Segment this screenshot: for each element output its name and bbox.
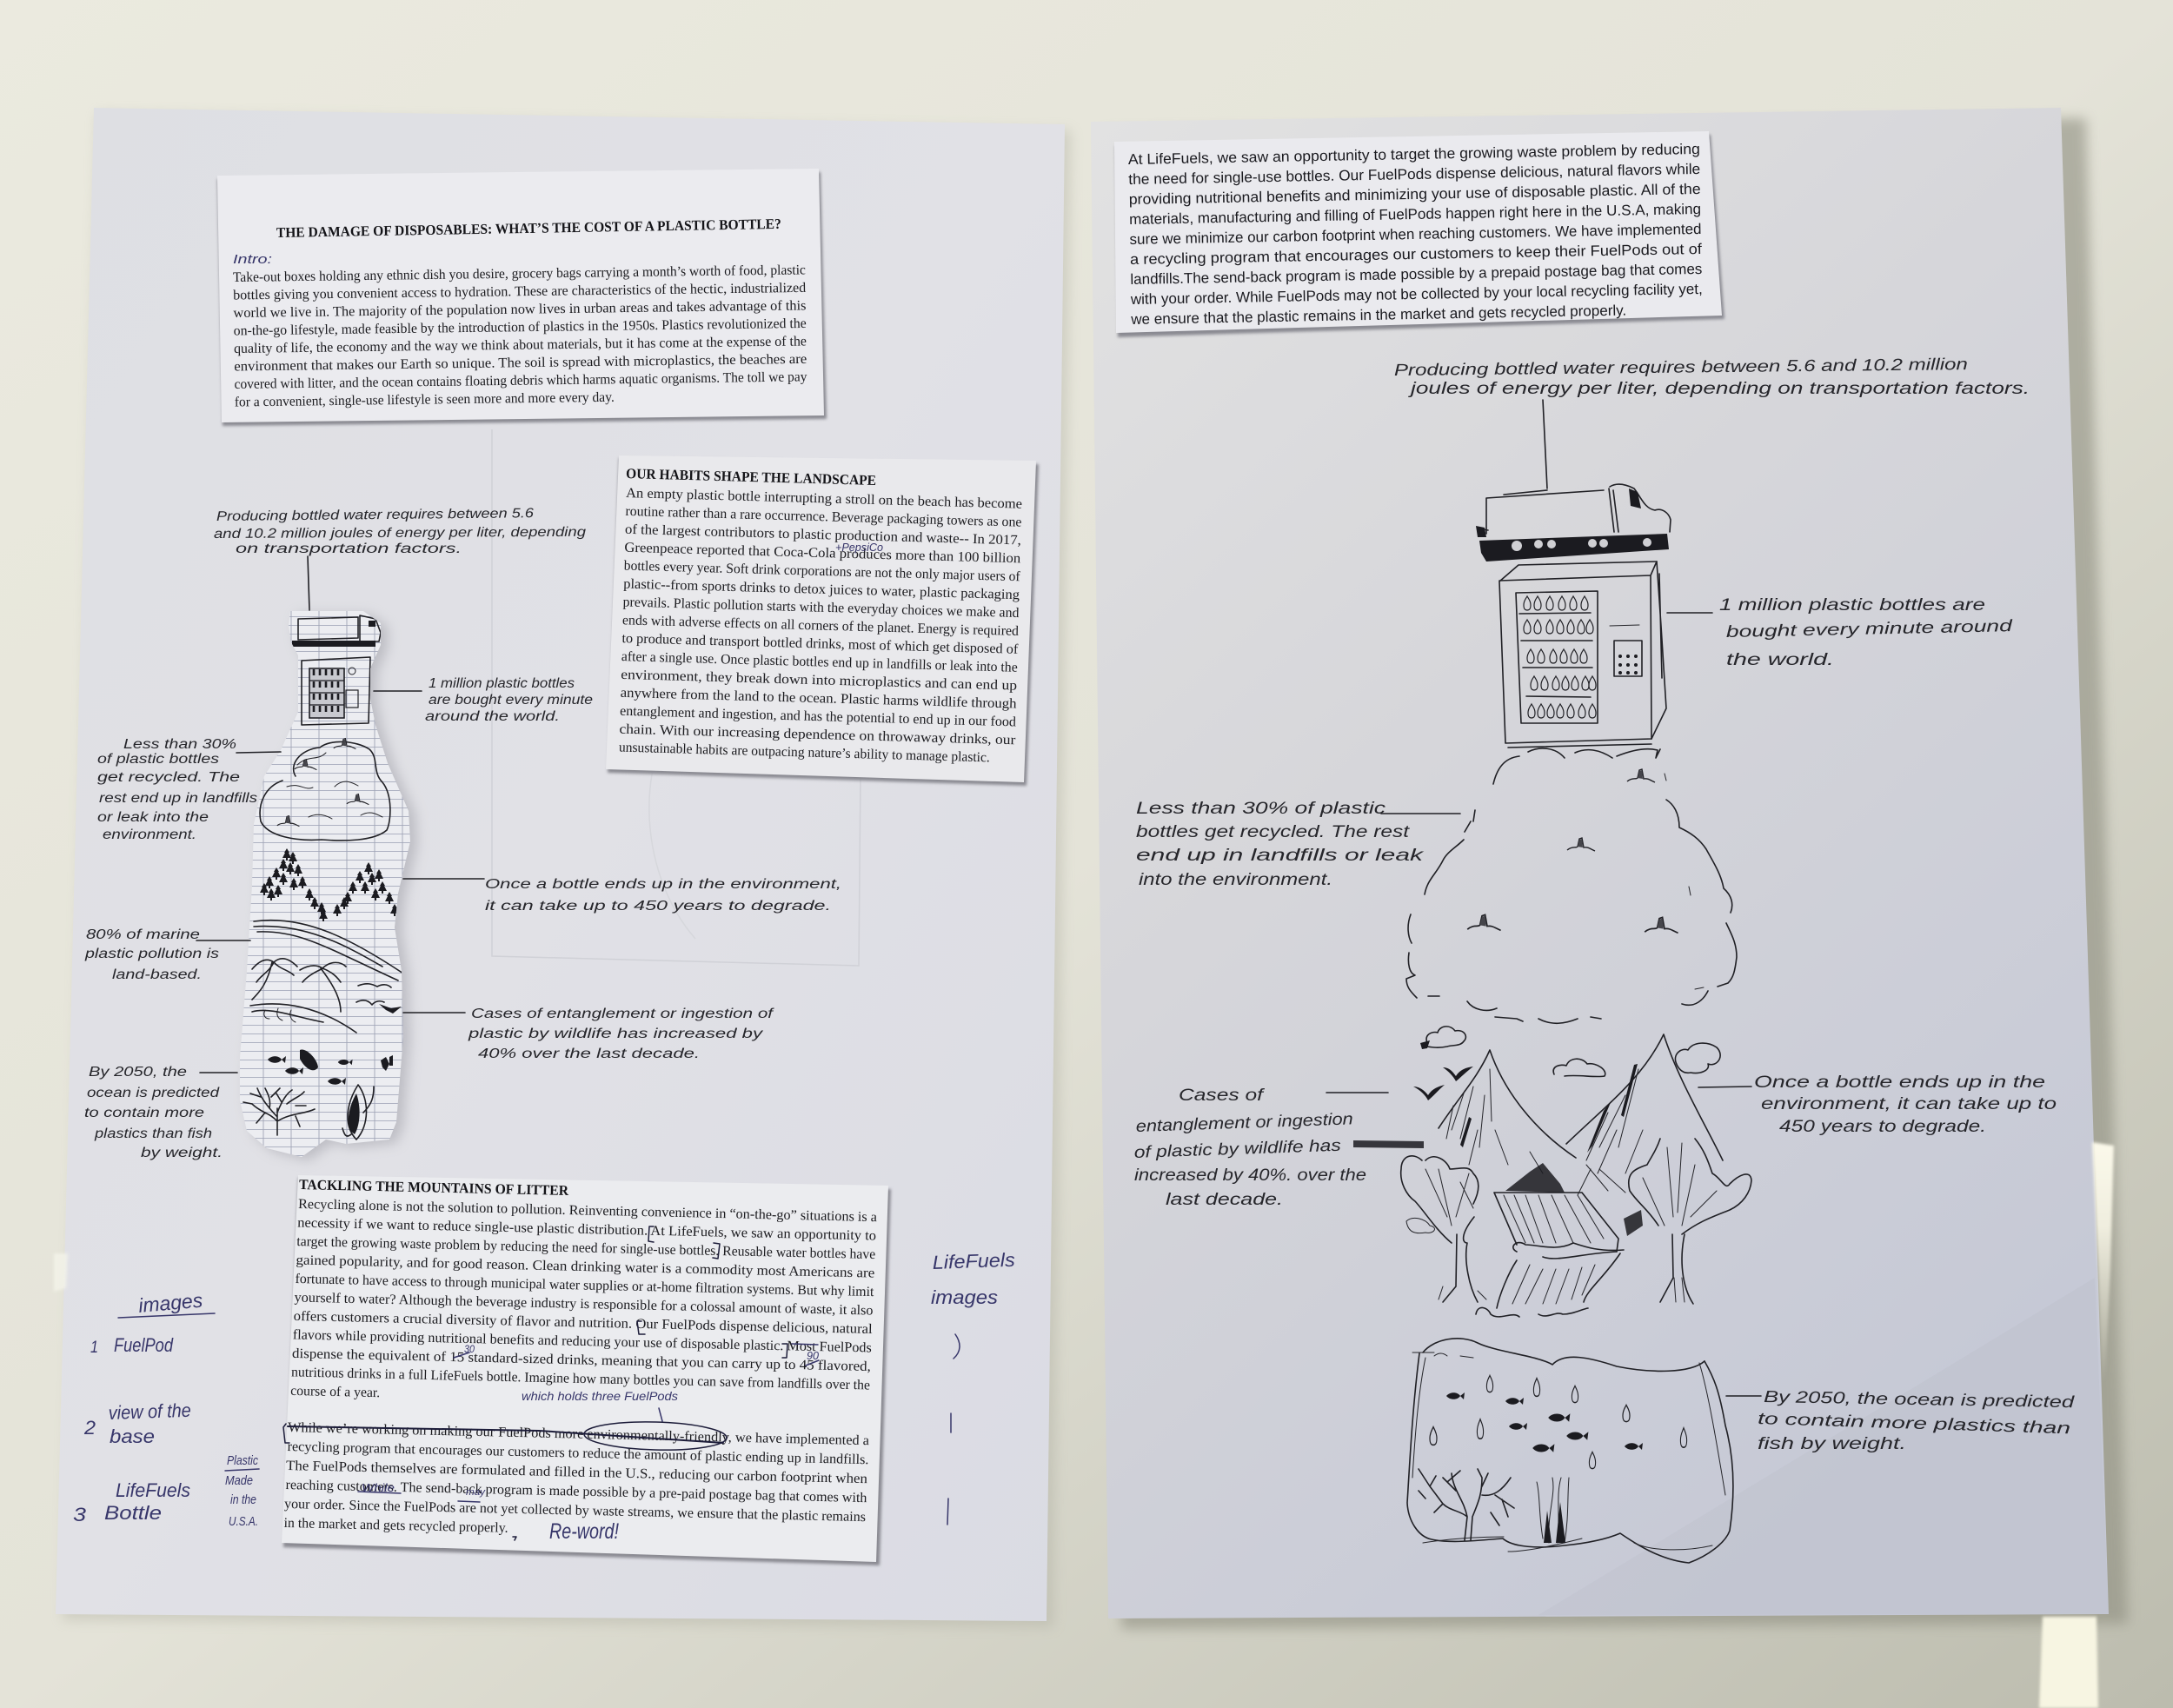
clouds and birds <box>1413 1027 1720 1100</box>
notes: lifefuels images: LifeFuels <box>932 1249 1015 1273</box>
text block: lifefuels strip: a recycling program that encourages our customers to keep their FuelPods out of <box>1130 241 1702 268</box>
right tree <box>1629 1139 1751 1304</box>
icon: small truck <box>292 615 381 647</box>
coral <box>1419 1469 1514 1540</box>
callout: one million bottles <box>1667 596 2014 669</box>
editing marks <box>283 1226 819 1540</box>
callout: entanglement: 40% over the last decade. <box>478 1047 700 1061</box>
text block: tackling second paragraph: While we’re working on making our FuelPods more environmentally-friendly, we have implemented a <box>288 1420 869 1448</box>
text block: intro paragraph: environment that makes our Earth so unique. The soil is spread with microplastics, the beaches are <box>234 352 807 374</box>
text block: lifefuels strip <box>1114 131 1724 337</box>
text block: habits paragraph: chain. With our increasing dependence on throwaway drinks, our <box>619 722 1016 748</box>
callout: entanglement: increased by 40%. over the <box>1134 1166 1366 1185</box>
callout: recycling rate: bottles get recycled. The rest <box>1136 823 1410 841</box>
callout: ocean 2050: By 2050, the <box>89 1065 187 1080</box>
text block: tackling first paragraph: Recycling alone is not the solution to pollution. Reinventing convenience in “on-the-go” situations is a <box>298 1197 877 1225</box>
callout: energy: joules of energy per liter, depending on transportation factors. <box>1407 380 2030 398</box>
callout: recycling rate <box>1136 800 1460 889</box>
illustration: ocean tank <box>1407 1339 1733 1563</box>
notes: images list: U.S.A. <box>229 1514 258 1529</box>
callout: degrade time: environment, it can take up to <box>1761 1095 2057 1113</box>
illustration: mountains, trees and waterfall <box>1401 1027 1751 1317</box>
text block: lifefuels strip: the need for single-use bottles. Our FuelPods dispense delicious, natural flavors while <box>1128 161 1700 188</box>
callout: one million bottles: around the world. <box>425 709 560 724</box>
callout: one million bottles: bought every minute around <box>1726 617 2014 641</box>
note: plus PepsiCo: +PepsiCo <box>835 541 883 554</box>
callout: entanglement: entanglement or ingestion <box>1135 1110 1353 1136</box>
text block: tackling second paragraph: The FuelPods themselves are formulated and filled in the U.S., reducing our carbon footprint when <box>286 1459 867 1486</box>
text block: tackling first paragraph: fortunate to have access to through municipal water supplies or at-home filtration systems. But why limit <box>295 1272 874 1299</box>
illustration: small litter cloud <box>260 739 390 841</box>
text block: habits paragraph <box>619 486 1023 766</box>
handwritten callout: energy: Producing bottled water requires between 5.6 <box>216 506 534 524</box>
callout: ocean 2050 <box>1726 1388 2076 1453</box>
callout: recycling rate: Less than 30% <box>123 737 236 752</box>
callout: one million bottles: 1 million plastic bottles are <box>1719 596 1985 615</box>
text block: habits paragraph: environment, they break down into microplastics and can end up <box>621 668 1017 694</box>
callout: degrade time: 450 years to degrade. <box>1779 1118 1986 1136</box>
text block: tackling first paragraph: necessity if we want to reduce single-use plastic distribution. At LifeFuels, we saw an opportunity to <box>297 1215 876 1244</box>
waterfall <box>1476 1163 1643 1317</box>
text block: habits paragraph: ends with adverse effects on all corners of the planet. Energy is required <box>622 613 1019 639</box>
seaweed <box>1537 1478 1569 1543</box>
callout: marine pollution: plastic pollution is <box>84 947 219 961</box>
illustration: small ocean floor <box>243 1050 393 1140</box>
callout: degrade time <box>403 877 841 914</box>
callout: recycling rate: Less than 30% of plastic <box>1136 800 1386 818</box>
notes: margin corrections: which holds three FuelPods <box>522 1389 678 1403</box>
handwritten callout: energy <box>214 506 586 610</box>
text block: lifefuels strip: materials, manufacturing and filling of FuelPods happen right here in the U.S.A, making <box>1129 201 1701 228</box>
callout: ocean 2050: By 2050, the ocean is predicted <box>1764 1388 2076 1412</box>
callout: energy <box>1394 356 2030 488</box>
callout: recycling rate: rest end up in landfills <box>99 791 257 806</box>
text block: lifefuels strip: At LifeFuels, we saw an opportunity to target the growing waste problem by reducing <box>1128 141 1700 168</box>
callout: recycling rate: of plastic bottles <box>97 752 219 767</box>
callout: entanglement: Cases of <box>1179 1087 1265 1105</box>
callout: ocean 2050: by weight. <box>141 1146 223 1160</box>
callout: entanglement: of plastic by wildlife has <box>1133 1137 1342 1162</box>
text block: lifefuels strip: landfills.The send-back program is made possible by a prepaid postage bag that comes <box>1130 261 1702 288</box>
text block: habits paragraph: routine rather than a rare occurrence. Beverage packaging towers as one <box>625 504 1022 530</box>
callout: marine pollution <box>84 927 250 982</box>
callout: ocean 2050: ocean is predicted <box>87 1086 221 1100</box>
text block: habits paragraph: to produce and transport bottled drinks, most of which get disposed of <box>621 631 1019 657</box>
text block: habits paragraph: anywhere from the land to the ocean. Plastic harms wildlife through <box>620 686 1017 712</box>
notes: images list: FuelPod <box>114 1334 174 1356</box>
text block: tackling first paragraph: flavors while providing nutritional benefits and reducing your use of disposable plastic. Most FuelPods <box>293 1327 872 1356</box>
text block: habits strip <box>606 455 1039 786</box>
illustration: small forested mountains <box>260 848 399 921</box>
notes: images list: base <box>110 1426 155 1447</box>
heading: tackling mountains: TACKLING THE MOUNTAINS OF LITTER <box>299 1176 569 1199</box>
callout: energy: Producing bottled water requires between 5.6 and 10.2 million <box>1394 356 1968 380</box>
text block: tackling second paragraph: in the market and gets recycled properly. <box>283 1516 508 1536</box>
illustration: litter cloud <box>1406 748 1737 1023</box>
illustration: bottle cutout on lined paper <box>240 611 410 1157</box>
text block: intro paragraph: Take-out boxes holding any ethnic dish you desire, grocery bags carrying a month’s worth of food, plastic <box>233 263 806 285</box>
text block: habits paragraph: after a single use. Once plastic bottles end up in landfills or leak into the <box>621 649 1018 675</box>
notes: lifefuels images: images <box>931 1286 998 1308</box>
icon: vending machine <box>1499 562 1666 748</box>
notes: lifefuels images <box>931 1249 1015 1525</box>
text block: tackling first paragraph: dispense the equivalent of 15 standard-sized drinks, meaning that you can carry up to 45 flavored, <box>292 1346 871 1374</box>
icon: truck <box>1476 484 1671 562</box>
callout: ocean 2050: to contain more plastics than <box>1758 1410 2070 1438</box>
callout: ocean 2050: fish by weight. <box>1758 1435 1906 1453</box>
text block: tackling second paragraph <box>283 1420 869 1544</box>
text block: habits paragraph: prevails. Plastic pollution starts with the everyday choices we make and <box>622 595 1020 621</box>
callout: marine pollution: land-based. <box>112 967 202 982</box>
handwritten callout: energy: and 10.2 million joules of energy per liter, depending <box>214 525 586 542</box>
notes: images list: 2 <box>83 1417 96 1439</box>
notes: images list: LifeFuels <box>116 1479 190 1501</box>
text block: tackling first paragraph: course of a year. <box>290 1384 380 1400</box>
text block: tackling first paragraph: nutritious drinks in a full LifeFuels bottle. Imagine how many bottles you can save from landfills over the <box>291 1365 870 1392</box>
callout: recycling rate <box>97 737 281 842</box>
text block: habits paragraph: of the largest contributors to plastic production and waste-- In 2017, <box>625 522 1021 548</box>
text block: tackling second paragraph: your order. Since the FuelPods are not yet collected by waste streams, we ensure that the plastic remains <box>284 1497 866 1525</box>
text block: tackling first paragraph: yourself to water? Although the beverage industry is responsible for a colossal amount of waste, it also <box>294 1290 874 1319</box>
text block: habits paragraph: unsustainable habits are outpacing nature’s ability to manage plastic. <box>619 740 990 765</box>
callout: degrade time: it can take up to 450 years to degrade. <box>485 899 831 914</box>
text block: tackling first paragraph: gained popularity, and for good reason. Clean drinking water is a commodity most Americans are <box>296 1253 874 1281</box>
icon: small vending machine <box>302 657 370 725</box>
text block: lifefuels strip: with your order. While FuelPods may not be collected by your local recycling facility yet, <box>1130 281 1703 308</box>
text block: lifefuels strip: providing nutritional benefits and minimizing your use of disposable plastic. All of the <box>1129 181 1701 208</box>
text block: intro paragraph: on-the-go lifestyle, made feasible by the introduction of plastics in the 1950s. Plastics revolutionized the <box>234 316 807 338</box>
callout: one million bottles: the world. <box>1726 651 1834 669</box>
callout: recycling rate: end up in landfills or leak <box>1136 847 1425 865</box>
callout: one million bottles: 1 million plastic bottles <box>429 676 575 691</box>
callout: entanglement: Cases of entanglement or ingestion of <box>471 1007 774 1021</box>
note: intro: Intro: <box>233 252 272 267</box>
text block: intro paragraph: quality of life, the economy and the way we think about materials, but it has come at the expense of the <box>234 334 807 356</box>
text block: tackling first paragraph: offers customers a crucial diversity of flavor and nutrition. Our FuelPods dispense delicious, natural <box>294 1309 873 1337</box>
notes: images list: Made <box>225 1473 253 1488</box>
notes: images list: images <box>137 1289 204 1317</box>
notes: images list: Bottle <box>104 1502 162 1524</box>
text block: habits paragraph: plastic--from sports drinks to detox juices to water, plastic packaging <box>623 576 1020 602</box>
callout: marine pollution: 80% of marine <box>86 927 200 942</box>
text block: tackling first paragraph: target the growing waste problem by reducing the need for single-use bottles. Reusable water bottles have <box>296 1234 875 1262</box>
text block: tackling second paragraph: reaching customers. The send-back program is made possible by a pre-paid postage bag that comes with <box>285 1478 867 1505</box>
callout: recycling rate: environment. <box>103 827 196 842</box>
callout: degrade time: Once a bottle ends up in the <box>1754 1073 2045 1092</box>
mountains <box>1439 1034 1723 1195</box>
illustration: small hillside with palms <box>250 920 409 1033</box>
callout: entanglement: last decade. <box>1166 1191 1283 1209</box>
left tree <box>1401 1156 1486 1302</box>
shadow: bottle cutout <box>247 615 417 1160</box>
text block: lifefuels strip: sure we minimize our carbon footprint when reaching customers. We have implemented <box>1129 221 1702 248</box>
callout: entanglement: plastic by wildlife has increased by <box>468 1027 764 1041</box>
text block: habits paragraph: Greenpeace reported that Coca-Cola produces more than 100 billion <box>624 541 1020 566</box>
text block: tackling second paragraph: recycling program that encourages our customers to reduce the amount of plastic ending up in landfills. <box>287 1439 869 1467</box>
callout: entanglement <box>1133 1087 1424 1209</box>
notes: margin corrections: Re-word! <box>549 1519 619 1544</box>
text block: title strip <box>217 169 827 426</box>
text block: lifefuels strip: we ensure that the plastic remains in the market and gets recycled properly. <box>1130 302 1626 328</box>
notes: margin corrections <box>362 1343 820 1544</box>
notes: images list: Plastic <box>227 1453 258 1468</box>
callout: one million bottles <box>374 676 593 724</box>
callout: degrade time: Once a bottle ends up in the environment, <box>485 877 841 892</box>
heading: our habits: OUR HABITS SHAPE THE LANDSCAPE <box>626 465 876 488</box>
callout: recycling rate: or leak into the <box>97 810 209 825</box>
notes: margin corrections: 90 <box>807 1349 820 1362</box>
text block: intro paragraph: world we live in. The majority of the population now lives in urban areas and takes advantage of this <box>233 298 807 321</box>
callout: recycling rate: into the environment. <box>1139 871 1332 889</box>
notes: margin corrections: While <box>362 1481 395 1494</box>
callout: ocean 2050 <box>84 1065 237 1160</box>
glare: reflection on table <box>54 1142 2114 1708</box>
notes: margin corrections: 30 <box>464 1343 475 1355</box>
notes: images list: view of the <box>108 1399 191 1424</box>
callout: recycling rate: get recycled. The <box>97 770 241 785</box>
callout: degrade time <box>1698 1073 2057 1136</box>
text block: intro paragraph: bottles giving you convenient access to hydration. These are characteristics of the hectic, industrialized <box>233 281 806 302</box>
text block: tackling first paragraph <box>290 1197 877 1412</box>
text block: intro paragraph: covered with litter, and the ocean contains floating debris which harms aquatic organisms. The toll we pay <box>234 369 807 392</box>
text block: intro paragraph <box>233 263 807 409</box>
text block: habits paragraph: An empty plastic bottle interrupting a stroll on the beach has become <box>626 486 1022 512</box>
notes: images list <box>73 1289 259 1529</box>
heading: damage of disposables: THE DAMAGE OF DISPOSABLES: WHAT’S THE COST OF A PLASTIC BOTTLE? <box>276 216 781 241</box>
notes: images list: 3 <box>73 1504 87 1525</box>
panel: right sheet <box>1091 108 2128 1629</box>
text block: habits paragraph: entanglement and ingestion, and has the potential to end up in our food <box>620 704 1016 729</box>
notes: images list: in the <box>230 1492 256 1507</box>
callout: one million bottles: are bought every minute <box>429 693 593 708</box>
callout: ocean 2050: to contain more <box>84 1106 204 1120</box>
notes: margin corrections: may <box>466 1487 487 1498</box>
text block: habits paragraph: bottles every year. Soft drink corporations are not the only major users of <box>624 559 1021 584</box>
callout: entanglement <box>403 1007 774 1061</box>
text block: tackling strip <box>282 1175 891 1565</box>
callout: ocean 2050: plastics than fish <box>94 1126 212 1141</box>
text block: intro paragraph: for a convenient, single-use lifestyle is seen more and more every day. <box>235 390 615 409</box>
notes: images list: 1 <box>90 1339 98 1357</box>
handwritten callout: energy: on transportation factors. <box>236 542 462 556</box>
